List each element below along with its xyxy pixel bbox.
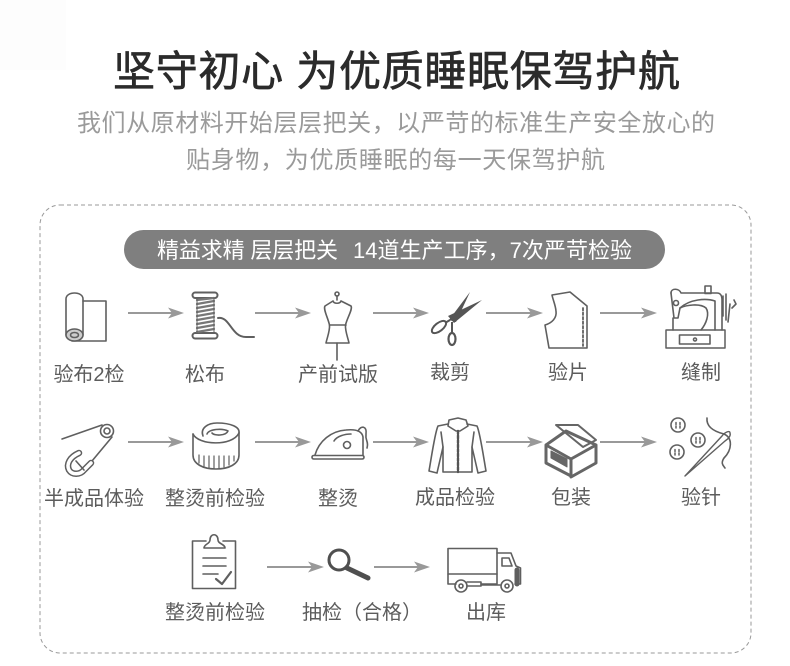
icon: magnifier — [329, 550, 368, 578]
label: 松布: 松布 — [185, 363, 225, 386]
subtitle text — [77, 110, 715, 174]
label: 成品检验: 成品检验 — [415, 486, 495, 509]
label: 缝制: 缝制 — [681, 361, 721, 384]
icon: cardboard box — [546, 425, 596, 477]
icon: delivery truck — [448, 548, 520, 592]
panel: process frame — [40, 205, 751, 653]
label: 抽检（合格）: 抽检（合格） — [302, 601, 422, 624]
arrow — [255, 308, 311, 318]
arrow — [600, 308, 657, 318]
arrow — [600, 436, 657, 448]
arrow — [255, 436, 311, 448]
icon: dress form — [325, 292, 351, 360]
icon: clipboard checklist — [192, 535, 236, 588]
label: 整烫前检验 (row 3): 整烫前检验 — [165, 601, 265, 624]
banner pill — [124, 230, 665, 269]
icon: shirt — [429, 418, 486, 473]
label: 整烫前检验: 整烫前检验 — [165, 487, 265, 510]
banner pill: 精益求精 层层把关 — [157, 238, 338, 263]
icon: buttons and needle — [670, 418, 730, 476]
label: 裁剪: 裁剪 — [430, 361, 470, 384]
arrow — [128, 308, 184, 318]
icon: scissors — [430, 292, 482, 345]
banner pill: 14道生产工序，7次严苛检验 — [353, 238, 632, 263]
arrow — [486, 436, 543, 448]
icon: garment pattern — [545, 292, 587, 348]
label: 半成品体验: 半成品体验 — [44, 487, 144, 510]
label: 产前试版: 产前试版 — [298, 363, 378, 386]
label: 包装: 包装 — [551, 486, 591, 509]
icon: fabric roll — [66, 293, 106, 341]
icon: safety pin — [62, 424, 114, 474]
label: 整烫: 整烫 — [318, 487, 358, 510]
subtitle text: 贴身物，为优质睡眠的每一天保驾护航 — [186, 147, 605, 174]
arrow — [373, 308, 429, 318]
title: 坚守初心 为优质睡眠保驾护航 — [113, 48, 680, 95]
icon: measuring tape — [193, 423, 239, 469]
arrow — [128, 436, 184, 448]
label: 出库: 出库 — [466, 601, 506, 624]
label: 验片: 验片 — [548, 361, 588, 384]
arrow — [486, 308, 543, 318]
arrow — [374, 562, 430, 572]
icon: sewing machine — [666, 286, 736, 348]
icon: iron — [312, 427, 368, 459]
label: 验针: 验针 — [681, 486, 721, 509]
arrow — [267, 562, 324, 572]
label: 验布2检: 验布2检 — [53, 363, 125, 386]
arrow — [373, 436, 429, 448]
subtitle text: 我们从原材料开始层层把关，以严苛的标准生产安全放心的 — [77, 110, 715, 137]
icon: thread spool — [192, 292, 254, 338]
